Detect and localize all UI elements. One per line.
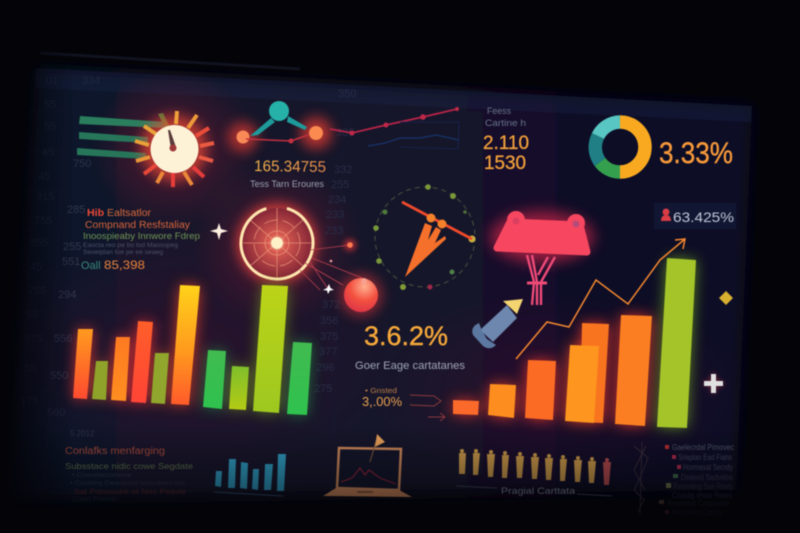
text block: bottom left: Coast Posedo bbox=[72, 497, 118, 503]
axis numbers: left column: 55 bbox=[44, 99, 56, 111]
text block: evaluation bbox=[81, 208, 200, 272]
axis numbers: left column: 285 bbox=[67, 204, 85, 216]
line chart: red trend bbox=[330, 107, 459, 149]
icon: white plus bbox=[704, 374, 723, 393]
icon: laptop bbox=[323, 434, 412, 497]
axis numbers: middle column: 275 bbox=[314, 383, 332, 395]
axis numbers: middle column: 233 bbox=[326, 209, 344, 221]
text block: bottom left: Conlafks menfarging bbox=[65, 446, 165, 457]
metric: 2.110 / 1530: 2.110 bbox=[483, 133, 529, 154]
radial target bbox=[232, 198, 362, 290]
axis numbers: left column: 175 bbox=[20, 395, 38, 407]
text block: bottom left: • Cosidng Deasicost tecoskers tos bbox=[70, 481, 185, 487]
icon: person bbox=[661, 208, 671, 221]
axis numbers: left column: 550 bbox=[50, 370, 68, 382]
metric: 2.110 / 1530: 1530 bbox=[484, 153, 526, 174]
axis numbers: left column: 45 bbox=[42, 147, 54, 159]
legend list bbox=[659, 443, 734, 517]
axis numbers: left column: 855 bbox=[30, 237, 48, 249]
clock icon bbox=[77, 111, 214, 187]
metric: 3.33%: 3.33% bbox=[659, 137, 733, 170]
legend list: Deased Sadvelos bbox=[681, 473, 733, 482]
axis numbers: middle column: 377 bbox=[319, 346, 337, 358]
text block: bottom left bbox=[65, 429, 193, 503]
metric: 165.34755: 165.34755 bbox=[254, 158, 326, 176]
icon: red ball bbox=[340, 274, 382, 316]
text block: evaluation: Seoeiplan toe pe ee seaeg bbox=[83, 250, 163, 256]
green bars bbox=[77, 113, 169, 159]
legend list: Gaelecrdal Pimovec bbox=[672, 443, 734, 452]
legend list: Hormasal Secrdy bbox=[683, 463, 733, 472]
axis numbers: left column: 755 bbox=[34, 215, 52, 227]
clock face bbox=[150, 125, 198, 173]
axis numbers: left column: 01 bbox=[46, 75, 58, 87]
arrow: trend line bbox=[516, 239, 685, 359]
axis numbers: middle column: 233 bbox=[325, 225, 343, 237]
icon: dashed circle with arrow bbox=[373, 184, 476, 290]
axis numbers: left column: 750 bbox=[73, 158, 91, 170]
axis numbers: left column: 55 bbox=[44, 121, 56, 133]
axis numbers: left column: 294 bbox=[58, 289, 76, 301]
caption: people row: Pragial Carttata bbox=[501, 486, 576, 497]
clock rays bbox=[135, 111, 214, 187]
legend list: Sriaplan Ead Fians bbox=[678, 453, 732, 462]
legend list: Coastig shsor Rears bbox=[672, 491, 732, 500]
text block: evaluation: Inoospieaby Innwore Fdrep bbox=[83, 231, 200, 242]
bar chart: right growth bbox=[453, 258, 696, 428]
axis numbers: left column: 45 bbox=[38, 171, 50, 183]
metric: 3.6.2%: 3,.00% bbox=[362, 394, 402, 409]
callout: 63.425% bbox=[654, 203, 736, 229]
axis numbers: left column: 560 bbox=[47, 407, 65, 419]
icon: sparkle bbox=[210, 223, 228, 240]
axis numbers: left column: 556 bbox=[54, 333, 72, 345]
icon: pink sign bbox=[490, 211, 594, 305]
axis numbers: middle column: 372 bbox=[322, 299, 340, 311]
axis numbers: middle column: 234 bbox=[328, 194, 346, 206]
axis numbers: middle column: 255 bbox=[331, 179, 349, 191]
icon: white spark bbox=[323, 284, 334, 294]
metric: 2.110 / 1530 bbox=[483, 106, 529, 174]
icon: gold diamond bbox=[719, 291, 733, 305]
icon: rocket bbox=[472, 299, 523, 348]
network diagram bbox=[228, 101, 332, 152]
axis numbers: middle column: 350 bbox=[338, 88, 356, 100]
axis numbers: left column: 315 bbox=[36, 191, 54, 203]
bar chart: left orange-green bbox=[73, 285, 312, 415]
legend list: Resoidiat Cosposed bbox=[667, 499, 729, 508]
small line chart bbox=[634, 442, 648, 515]
text block: bottom left: Subsstace nidic cowe Segdate bbox=[65, 461, 193, 471]
metric: 165.34755 bbox=[250, 158, 326, 190]
panel: dashboard screen bbox=[0, 53, 752, 500]
text block: evaluation: 85,398 bbox=[104, 258, 145, 272]
connector lines bbox=[300, 245, 362, 290]
legend list: Resouthod Coscos bbox=[672, 508, 722, 517]
text block: evaluation: Oall bbox=[81, 260, 101, 272]
metric: 2.110 / 1530: Feess bbox=[487, 106, 511, 116]
axis numbers: left column bbox=[20, 75, 100, 419]
axis numbers: middle column: 356 bbox=[320, 315, 338, 327]
metric: 3.6.2%: 3.6.2% bbox=[364, 321, 448, 351]
axis numbers: left column: 55 bbox=[26, 309, 38, 321]
arrows bbox=[410, 395, 445, 421]
legend list: Reasoling Sue Rasty bbox=[673, 482, 733, 491]
text block: evaluation: Compnand Resfstaliay bbox=[85, 220, 190, 231]
axis numbers: middle column bbox=[314, 88, 356, 395]
text block: bottom left: Sat Ponosoee or Nos Peasle bbox=[74, 489, 186, 496]
axis numbers: left column: 575 bbox=[24, 333, 42, 345]
text block: evaluation: Eaocta reo pe bo lod Maosspeg bbox=[83, 243, 178, 249]
axis numbers: left column: 255 bbox=[63, 241, 81, 253]
axis numbers: left column: 55 bbox=[24, 363, 36, 375]
metric: 2.110 / 1530: Cartine h bbox=[485, 118, 526, 128]
axis numbers: middle column: 332 bbox=[334, 164, 352, 176]
metric: 3.6.2%: • Gnsted bbox=[365, 388, 397, 395]
axis numbers: left column: 334 bbox=[82, 75, 100, 87]
pictogram: people row bbox=[459, 449, 611, 485]
metric: 3.6.2%: Goer Eage cartatanes bbox=[355, 360, 466, 372]
axis numbers: middle column: 375 bbox=[320, 331, 338, 343]
text block: bottom left: • Coscelarcommar bbox=[72, 473, 132, 479]
axis numbers: left column: 755 bbox=[28, 285, 46, 297]
donut chart bbox=[595, 122, 645, 172]
axis numbers: middle column: 335 bbox=[336, 127, 354, 139]
metric: 165.34755: Tess Tarn Eroures bbox=[250, 179, 324, 190]
text block: bottom left: 5 2012 bbox=[70, 429, 95, 438]
axis numbers: left column: 45 bbox=[30, 261, 42, 273]
axis numbers: middle column: 296 bbox=[316, 362, 334, 374]
text block: evaluation: Hib Ealtsatlor bbox=[87, 208, 152, 219]
callout: 63.425%: 63.425% bbox=[673, 209, 734, 225]
bar chart: blue bbox=[214, 454, 286, 496]
axis numbers: left column: 551 bbox=[62, 256, 80, 268]
metric: 3.6.2% bbox=[355, 321, 466, 409]
